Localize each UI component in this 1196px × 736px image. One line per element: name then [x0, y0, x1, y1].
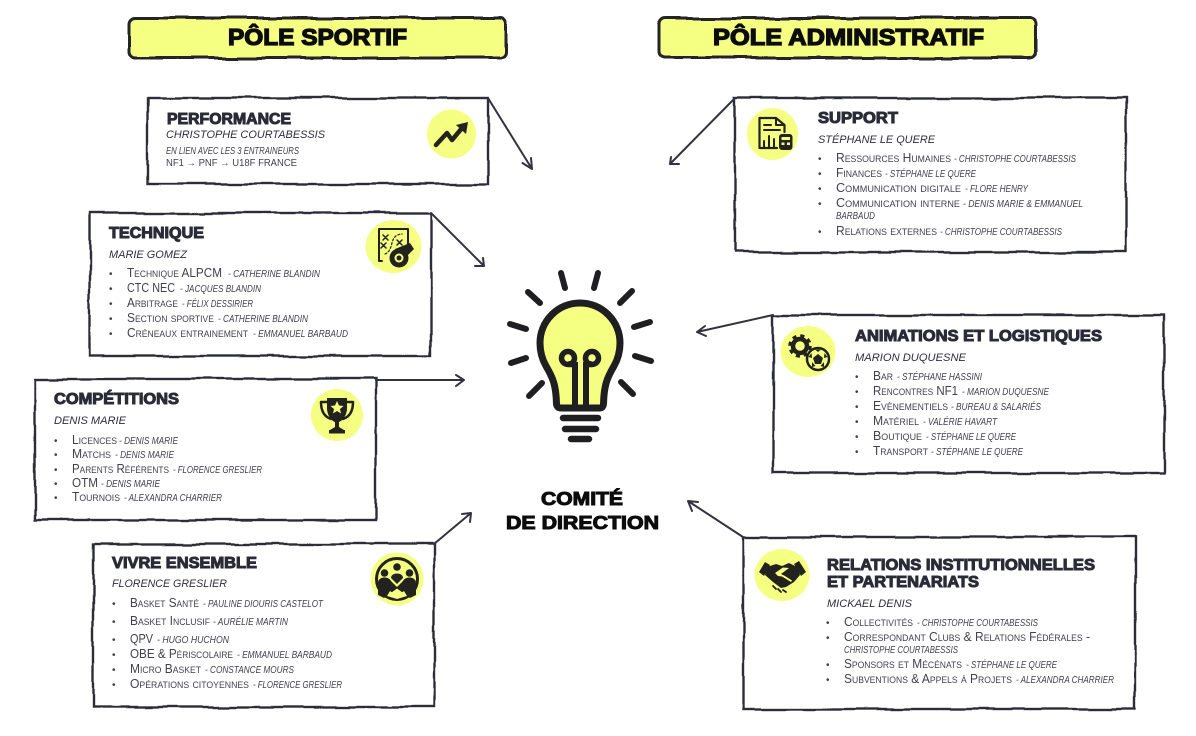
panel: compétitions: •: [54, 493, 58, 504]
panel: animations et logistiques: •: [855, 387, 859, 398]
panel: animations et logistiques: •: [855, 432, 859, 443]
panel: vivre ensemble: Basket Santé: [130, 596, 199, 610]
panel: technique: [90, 213, 431, 356]
panel: vivre ensemble: OBE & Périscolaire: [130, 647, 233, 661]
panel: animations et logistiques: •: [855, 417, 859, 428]
panel: vivre ensemble: - CONSTANCE MOURS: [205, 665, 294, 676]
panel: vivre ensemble: •: [112, 635, 116, 646]
arrow: performance to comité: [488, 98, 532, 169]
panel: support: - DENIS MARIE & EMMANUEL: [963, 199, 1083, 210]
panel: relations institutionnelles et partenariats: Subventions & Appels à Projets: [844, 672, 1012, 686]
panel: support: - CHRISTOPHE COURTABESSIS: [940, 227, 1062, 238]
panel: relations institutionnelles et partenariats: Collectivités: [844, 615, 913, 629]
panel: support: [735, 98, 1126, 252]
panel: technique: •: [109, 329, 113, 340]
panel: vivre ensemble: - FLORENCE GRESLIER: [253, 680, 342, 691]
panel: vivre ensemble: •: [112, 617, 116, 628]
panel: animations et logistiques: [773, 315, 1164, 473]
panel: vivre ensemble: FLORENCE GRESLIER: [112, 578, 227, 590]
panel: support: SUPPORT: [818, 110, 899, 127]
panel: compétitions: COMPÉTITIONS: [54, 391, 179, 408]
panel: vivre ensemble: - EMMANUEL BARBAUD: [237, 650, 332, 661]
panel: relations institutionnelles et partenariats: •: [826, 660, 830, 671]
panel: compétitions: •: [54, 465, 58, 476]
panel: compétitions: - FLORENCE GRESLIER: [173, 465, 262, 476]
panel: vivre ensemble: Basket Inclusif: [130, 614, 210, 628]
panel: support: - FLORE HENRY: [965, 184, 1029, 195]
panel: compétitions: - DENIS MARIE: [119, 436, 178, 447]
panel: animations et logistiques: Evènementiels: [873, 399, 948, 413]
panel: support: Ressources Humaines: [836, 151, 951, 165]
panel: vivre ensemble: [93, 544, 434, 707]
panel: vivre ensemble: •: [112, 599, 116, 610]
panel: animations et logistiques: Bar: [873, 369, 893, 383]
panel: technique: Créneaux entrainement: [127, 326, 248, 340]
panel: compétitions: - DENIS MARIE: [101, 479, 160, 490]
panel: relations institutionnelles et partenariats: •: [826, 633, 830, 644]
panel: technique: - CATHERINE BLANDIN: [228, 269, 321, 280]
arrow: relations to comité: [688, 501, 743, 537]
panel: vivre ensemble: VIVRE ENSEMBLE: [112, 555, 257, 572]
panel: support: •: [818, 154, 822, 165]
panel: compétitions: •: [54, 479, 58, 490]
panel: relations institutionnelles et partenariats: Correspondant Clubs & Relations Fédérales -: [844, 630, 1090, 644]
panel: performance: [147, 98, 488, 184]
panel: animations et logistiques: Matériel: [873, 414, 919, 428]
icon: light bulb: [510, 273, 651, 439]
panel: support: BARBAUD: [836, 211, 875, 222]
panel: relations institutionnelles et partenariats: Sponsors et Mécénats: [844, 657, 962, 671]
heading: pôle sportif: PÔLE SPORTIF: [228, 23, 407, 50]
title: comité de direction: COMITÉ: [541, 488, 623, 509]
panel: relations institutionnelles et partenariats: - ALEXANDRA CHARRIER: [1016, 675, 1114, 686]
panel: technique: - FÉLIX DESSIRIER: [182, 297, 253, 310]
heading: pôle administratif: [659, 18, 1036, 58]
panel: vivre ensemble: - HUGO HUCHON: [157, 635, 230, 646]
panel: compétitions: OTM: [72, 476, 98, 490]
panel: support: STÉPHANE LE QUERE: [818, 133, 936, 146]
panel: support: •: [818, 227, 822, 238]
panel: performance: PERFORMANCE: [167, 111, 291, 128]
panel: vivre ensemble: •: [112, 665, 116, 676]
panel: animations et logistiques: •: [855, 402, 859, 413]
panel: technique: TECHNIQUE: [109, 225, 204, 242]
panel: animations et logistiques: •: [855, 447, 859, 458]
panel: support: •: [818, 169, 822, 180]
title: comité de direction: [506, 488, 659, 533]
panel: animations et logistiques: - STÉPHANE HASSINI: [897, 370, 982, 383]
panel: animations et logistiques: - VALÉRIE HAVART: [923, 415, 998, 428]
panel: animations et logistiques: - STÉPHANE LE QUERE: [926, 430, 1016, 443]
panel: animations et logistiques: Boutique: [873, 429, 922, 443]
panel: support: Communication digitale: [836, 181, 961, 195]
panel: support: •: [818, 199, 822, 210]
panel: technique: CTC NEC: [127, 281, 175, 295]
panel: relations institutionnelles et partenariats: - CHRISTOPHE COURTABESSIS: [917, 618, 1038, 629]
panel: relations institutionnelles et partenariats: ET PARTENARIATS: [827, 574, 979, 591]
panel: animations et logistiques: Transport: [873, 444, 928, 458]
panel: animations et logistiques: ANIMATIONS ET LOGISTIQUES: [855, 328, 1102, 345]
panel: support: - STÉPHANE LE QUERE: [885, 167, 976, 180]
arrow: support to comité: [670, 98, 735, 164]
panel: relations institutionnelles et partenariats: [743, 537, 1135, 709]
panel: support: - CHRISTOPHE COURTABESSIS: [954, 154, 1076, 165]
title: comité de direction: DE DIRECTION: [506, 513, 659, 533]
panel: compétitions: Matchs: [72, 447, 111, 461]
panel: animations et logistiques: - BUREAU & SALARIÉS: [951, 400, 1041, 413]
panel: support: Communication interne: [836, 196, 960, 210]
panel: technique: •: [109, 314, 113, 325]
heading: pôle administratif: PÔLE ADMINISTRATIF: [713, 23, 984, 50]
panel: vivre ensemble: Micro Basket: [130, 662, 201, 676]
arrow: vivre ensemble to comité: [434, 513, 471, 544]
panel: technique: Technique ALPCM: [127, 266, 222, 280]
panel: animations et logistiques: Rencontres NF1: [873, 384, 958, 398]
panel: compétitions: •: [54, 436, 58, 447]
panel: relations institutionnelles et partenariats: •: [826, 618, 830, 629]
panel: performance: NF1 → PNF → U18F FRANCE: [166, 158, 297, 169]
panel: technique: - CATHERINE BLANDIN: [218, 314, 309, 325]
panel: compétitions: Parents Référents: [72, 462, 169, 476]
arrow: animations to comité: [697, 315, 773, 336]
panel: support: Finances: [836, 166, 882, 180]
panel: vivre ensemble: •: [112, 680, 116, 691]
panel: technique: Section sportive: [127, 311, 214, 325]
panel: technique: - EMMANUEL BARBAUD: [253, 329, 348, 340]
arrow: compétitions to comité: [376, 375, 464, 386]
panel: technique: •: [109, 299, 113, 310]
panel: vivre ensemble: Opérations citoyennes: [130, 677, 249, 691]
panel: technique: •: [109, 269, 113, 280]
panel: relations institutionnelles et partenariats: RELATIONS INSTITUTIONNELLES: [827, 557, 1095, 574]
panel: compétitions: - ALEXANDRA CHARRIER: [124, 493, 222, 504]
panel: vivre ensemble: - PAULINE DIOURIS CASTELOT: [203, 599, 324, 610]
panel: relations institutionnelles et partenariats: •: [826, 675, 830, 686]
panel: compétitions: - DENIS MARIE: [115, 450, 174, 461]
panel: technique: MARIE GOMEZ: [109, 249, 188, 261]
panel: support: •: [818, 184, 822, 195]
panel: relations institutionnelles et partenariats: MICKAEL DENIS: [827, 598, 913, 610]
panel: animations et logistiques: - STÉPHANE LE QUERE: [931, 445, 1023, 458]
heading: pôle sportif: [130, 18, 506, 58]
panel: animations et logistiques: - MARION DUQUESNE: [962, 387, 1049, 398]
panel: support: Relations externes: [836, 224, 937, 238]
panel: compétitions: Tournois: [72, 490, 120, 504]
panel: technique: •: [109, 284, 113, 295]
panel: performance: CHRISTOPHE COURTABESSIS: [166, 129, 326, 141]
panel: technique: Arbitrage: [127, 296, 178, 310]
panel: technique: - JACQUES BLANDIN: [180, 284, 262, 295]
panel: performance: EN LIEN AVEC LES 3 ENTRAINEURS: [166, 146, 299, 157]
panel: relations institutionnelles et partenariats: - STÉPHANE LE QUERE: [966, 658, 1057, 671]
panel: compétitions: [35, 379, 376, 520]
panel: compétitions: •: [54, 450, 58, 461]
panel: vivre ensemble: QPV: [130, 632, 154, 646]
panel: compétitions: DENIS MARIE: [54, 415, 127, 427]
panel: vivre ensemble: - AURÉLIE MARTIN: [213, 615, 289, 628]
arrow: technique to comité: [431, 213, 484, 266]
panel: relations institutionnelles et partenariats: CHRISTOPHE COURTABESSIS: [844, 645, 958, 656]
panel: animations et logistiques: MARION DUQUESNE: [855, 352, 967, 364]
panel: animations et logistiques: •: [855, 372, 859, 383]
panel: vivre ensemble: •: [112, 650, 116, 661]
panel: compétitions: Licences: [72, 433, 117, 447]
